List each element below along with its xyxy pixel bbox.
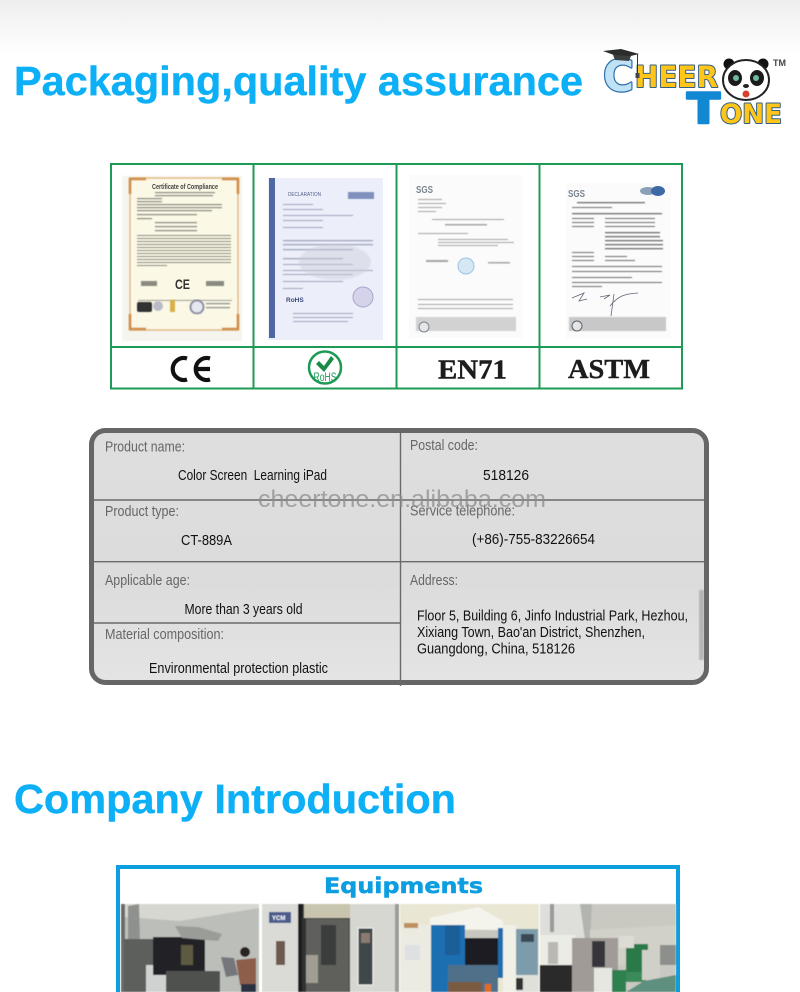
- panel: equipments: [118, 867, 678, 992]
- cell: applicable age: Applicable age:: [105, 573, 190, 589]
- cell: address: Floor 5, Building 6, Jinfo Industrial Park, Hezhou,: [417, 608, 688, 624]
- cell: postal code: Postal code:: [410, 438, 478, 454]
- certificate: declaration paper: RoHS: [286, 297, 304, 304]
- certificate: SGS EN71 paper: [409, 175, 523, 338]
- cell: address: Address:: [410, 573, 458, 589]
- cell: product type: [105, 504, 232, 549]
- cell: service telephone: (+86)-755-83226654: [472, 532, 595, 548]
- cell: service telephone: [410, 504, 595, 548]
- icon: RoHS badge: [309, 352, 341, 384]
- certificate logos: [137, 300, 230, 314]
- certificate CE mark: CE: [175, 276, 190, 292]
- icon: RoHS badge: RoHS: [314, 370, 336, 384]
- cell: postal code: 518126: [483, 468, 529, 484]
- cell: service telephone: Service telephone:: [410, 504, 515, 520]
- cell: product name: [105, 440, 327, 484]
- panel heading: Equipments: [324, 874, 483, 898]
- table dividers: [94, 433, 704, 686]
- certificate: SGS EN71 paper: SGS: [416, 185, 433, 196]
- certificate: declaration paper: DECLARATION: [288, 192, 321, 198]
- photo: YCM machining centre: [262, 904, 399, 992]
- cell: address: Xixiang Town, Bao'an District, Shenzhen,: [417, 625, 645, 641]
- cell: product type: Product type:: [105, 504, 179, 520]
- table right-edge shading: [699, 590, 704, 660]
- label: EN71: EN71: [438, 354, 507, 384]
- logo: CheerTone: [603, 49, 786, 133]
- icon: CE mark: [173, 358, 210, 380]
- heading: Packaging, quality assurance: Packaging,quality assurance: [14, 58, 583, 104]
- table frame: [92, 430, 706, 682]
- photo: wire cutting machine with operator: [121, 904, 259, 992]
- certificate: declaration paper: [268, 178, 383, 340]
- cell: applicable age: More than 3 years old: [184, 602, 302, 618]
- label: ASTM: ASTM: [568, 354, 650, 384]
- trademark: TM: [773, 58, 786, 68]
- icon: graduation cap: [603, 49, 640, 78]
- cell: applicable age: [105, 573, 302, 618]
- cell: material composition: Environmental protection plastic: [149, 661, 328, 677]
- cell: address: Guangdong, China, 518126: [417, 642, 575, 658]
- heading: Company Introduction: Company Introduction: [14, 776, 456, 822]
- logo cheer letters: T: [687, 84, 720, 133]
- cell: address: [410, 573, 688, 658]
- panel: certificates: [111, 164, 682, 388]
- cell: product name: Color Screen Learning iPad: [178, 468, 327, 484]
- logo cheer letters: C: [603, 51, 634, 102]
- certificate corner ornaments: [130, 179, 238, 329]
- certificate body lines: [137, 192, 232, 301]
- icon: panda face: [723, 58, 769, 100]
- certificate grid lines: [111, 164, 682, 388]
- photo: blue machining centre: [400, 904, 539, 992]
- certificate: SGS ASTM paper: SGS: [568, 189, 585, 200]
- cell: product name: Product name:: [105, 440, 185, 456]
- photo: YCM machining centre: YCM: [272, 916, 285, 922]
- cell: material composition: Material composition:: [105, 627, 224, 643]
- panel border: [118, 867, 678, 992]
- watermark: cheertone.en.alibaba.com: [258, 486, 546, 513]
- logo cheer letters: [603, 51, 782, 133]
- photo: green workshop machines: [540, 904, 676, 992]
- cell: product type: CT-889A: [181, 533, 232, 549]
- panel: product information table: [92, 430, 706, 686]
- top grey fade band: [0, 0, 800, 56]
- certificate: compliance paper: [122, 176, 242, 341]
- cell: postal code: [410, 438, 529, 484]
- certificate: SGS ASTM paper: [566, 183, 671, 339]
- logo cheer letters: HEER: [635, 60, 718, 94]
- logo cheer letters: ONE: [720, 99, 782, 130]
- certificate heading: Certificate of Compliance: [152, 182, 218, 191]
- cell: material composition: [105, 627, 328, 677]
